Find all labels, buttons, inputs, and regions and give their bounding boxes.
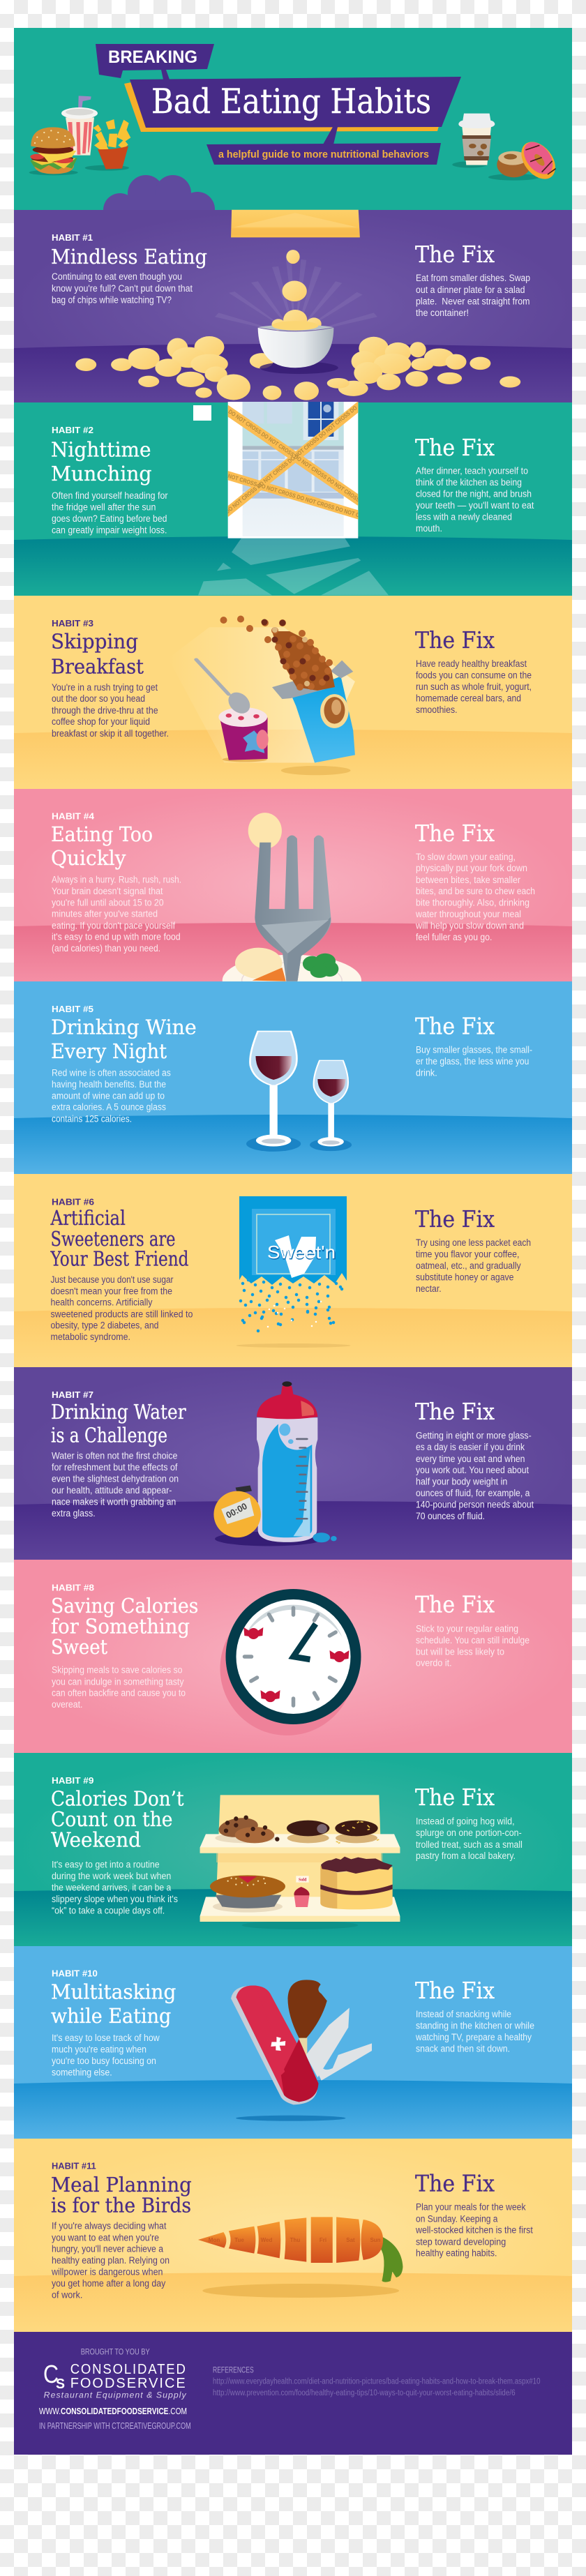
text block: coffee shop for your liquid bbox=[52, 716, 150, 727]
text block: during the work week but when bbox=[52, 1871, 171, 1881]
text block bbox=[52, 1665, 186, 1710]
heading: Sweet bbox=[51, 1635, 107, 1659]
fix heading: The Fix bbox=[415, 820, 495, 847]
fix heading: The Fix bbox=[415, 1013, 495, 1040]
icon: bakery shelves bbox=[200, 1795, 400, 1929]
fix text: 70 ounces of fluid. bbox=[416, 1511, 485, 1521]
text block: amount of wine can add up to bbox=[52, 1090, 165, 1101]
icon: burger, soda and fries bbox=[29, 96, 130, 175]
fix text: step toward developing bbox=[416, 2236, 506, 2247]
fix text: watching TV, prepare a healthy bbox=[415, 2032, 532, 2042]
text block: If you're always deciding what bbox=[52, 2221, 167, 2231]
icon: water bottle and stopwatch bbox=[213, 1381, 337, 1546]
icon: sliced carrot calendar: Thu bbox=[290, 2237, 300, 2243]
fix text: splurge on one portion-con- bbox=[416, 1828, 522, 1838]
text block: nace makes it worth grabbing an bbox=[52, 1497, 176, 1507]
fix text: plate. Never eat straight from bbox=[416, 296, 530, 307]
text block: it's easy to end up with more food bbox=[52, 932, 181, 942]
fix text: homemade cereal bars, and bbox=[416, 693, 521, 703]
heading: Skipping bbox=[51, 630, 138, 654]
text block: extra glass. bbox=[52, 1508, 96, 1519]
text block: even the slightest dehydration on bbox=[52, 1474, 179, 1484]
text block: You're in a rush trying to get bbox=[52, 682, 158, 693]
heading: Multitasking bbox=[51, 1980, 176, 2003]
icon: sliced carrot calendar: Sat bbox=[346, 2237, 355, 2243]
fix text: physically put your fork down bbox=[416, 863, 527, 873]
label: HABIT #5 bbox=[52, 1004, 93, 1014]
fix text bbox=[416, 1816, 523, 1861]
fix text: ounces of fluid, for example, a bbox=[416, 1488, 530, 1498]
fix text: will help you slow down and bbox=[415, 921, 524, 931]
fix text: out a dinner plate for a salad bbox=[416, 285, 525, 295]
heading: Calories Don’t bbox=[51, 1787, 184, 1811]
icon: dissolving sweetener packet bbox=[236, 1196, 350, 1348]
fix heading: The Fix bbox=[415, 1398, 495, 1425]
heading: is for the Birds bbox=[51, 2193, 191, 2217]
fix heading: The Fix bbox=[415, 626, 495, 654]
icon: sliced carrot calendar: Wed bbox=[261, 2237, 272, 2243]
references: http://www.prevention.com/food/healthy-eating-tips/10-ways-to-quit-your-worst-eating-habits/slide/6 bbox=[213, 2389, 516, 2397]
fix text: snack and then sit down. bbox=[416, 2044, 510, 2054]
fix text: Instead of going hog wild, bbox=[416, 1816, 515, 1826]
text block: for refreshment but the effects of bbox=[52, 1462, 178, 1472]
text block bbox=[52, 2033, 160, 2077]
heading: Count on the bbox=[51, 1807, 173, 1831]
text block: Your brain doesn't signal that bbox=[52, 886, 163, 896]
heading bbox=[51, 438, 152, 485]
text block: willpower is dangerous when bbox=[51, 2267, 163, 2277]
text block: something else. bbox=[52, 2067, 112, 2077]
text block: metabolic syndrome. bbox=[50, 1332, 130, 1342]
heading: is a Challenge bbox=[51, 1423, 167, 1447]
text block: you want to eat when you're bbox=[52, 2232, 159, 2243]
text block bbox=[52, 1450, 179, 1519]
label: HABIT #8 bbox=[52, 1583, 94, 1592]
heading: Artificial bbox=[50, 1206, 126, 1230]
text block: Often find yourself heading for bbox=[52, 490, 168, 501]
fix text: time you flavor your coffee, bbox=[416, 1249, 519, 1260]
icon: fork with plate bbox=[223, 813, 361, 1007]
icon: sliced carrot calendar: Fri bbox=[320, 2237, 326, 2243]
banner: subtitle: a helpful guide to more nutritional behaviors bbox=[218, 149, 429, 160]
fix text: water throughout your meal bbox=[415, 909, 521, 919]
fix text: well-stocked kitchen is the first bbox=[415, 2225, 533, 2236]
label: HABIT #2 bbox=[52, 425, 93, 435]
text block bbox=[52, 490, 168, 536]
text block bbox=[50, 1274, 193, 1342]
text block: healthy eating plan. Relying on bbox=[52, 2255, 170, 2266]
heading bbox=[51, 1787, 184, 1851]
panel: habit 9 calories on the weekend bbox=[14, 1753, 572, 1946]
heading: while Eating bbox=[51, 2004, 171, 2028]
icon: taped-off kitchen bbox=[198, 402, 389, 595]
logo: Consolidated Foodservice bbox=[43, 2360, 187, 2400]
text block: Continuing to eat even though you bbox=[52, 271, 182, 282]
text block: eating. If you don't pace yourself bbox=[52, 920, 175, 931]
fix text: er the glass, the less wine you bbox=[416, 1056, 529, 1067]
panel: habit 10 multitasking bbox=[14, 1946, 572, 2139]
panel: habit 3 skipping breakfast bbox=[14, 596, 572, 789]
label: HABIT #7 bbox=[52, 1390, 93, 1400]
text block: breakfast or skip it all together. bbox=[52, 728, 169, 739]
heading bbox=[51, 1594, 198, 1659]
fix text: 140-pound person needs about bbox=[416, 1500, 534, 1510]
logo: Consolidated Foodservice: CONSOLIDATED bbox=[70, 2362, 187, 2377]
text block: you get home after a long day bbox=[52, 2278, 166, 2289]
header panel bbox=[14, 28, 572, 210]
fix text bbox=[415, 852, 535, 942]
fix text: Getting in eight or more glass- bbox=[416, 1430, 532, 1441]
text block: (and calories) than you need. bbox=[52, 943, 160, 954]
text block: sweetened products are still linked to bbox=[50, 1309, 193, 1319]
logo: Consolidated Foodservice: Restaurant Equipment & Supply bbox=[44, 2392, 187, 2400]
icon: sliced carrot calendar: Sun bbox=[370, 2237, 381, 2243]
text block bbox=[52, 1860, 178, 1915]
text block: you're too busy focusing on bbox=[52, 2056, 156, 2066]
logo: Consolidated Foodservice: C bbox=[43, 2360, 59, 2388]
fix text: mouth. bbox=[416, 523, 442, 534]
fix text: feel fuller as you go. bbox=[416, 932, 492, 942]
heading: Quickly bbox=[51, 846, 126, 870]
fix text bbox=[416, 466, 534, 534]
fix text: every time you eat and when bbox=[416, 1454, 525, 1464]
text block bbox=[51, 2221, 170, 2300]
heading: Weekend bbox=[51, 1828, 141, 1851]
text block: contains 125 calories. bbox=[52, 1113, 132, 1124]
fix text: Have ready healthy breakfast bbox=[416, 658, 527, 669]
icon: cloud bbox=[103, 175, 215, 227]
text block: Water is often not the first choice bbox=[52, 1450, 177, 1461]
icon: sliced carrot calendar: Mon bbox=[209, 2237, 220, 2243]
text block: our health, attitude and appear- bbox=[52, 1485, 172, 1496]
icon: two wine glasses bbox=[246, 1032, 352, 1152]
text block: hungry, you'll never achieve a bbox=[52, 2244, 163, 2254]
heading: Saving Calories bbox=[51, 1594, 198, 1618]
heading: Every Night bbox=[51, 1039, 167, 1063]
fix heading: The Fix bbox=[415, 2170, 495, 2197]
text block: extra calories. A 5 ounce glass bbox=[52, 1102, 166, 1113]
fix text: Eat from smaller dishes. Swap bbox=[416, 273, 530, 283]
fix text: bite thoroughly. Also, drinking bbox=[416, 898, 529, 908]
fix text bbox=[416, 1430, 534, 1521]
fix heading: The Fix bbox=[415, 1977, 495, 2004]
label: HABIT #4 bbox=[52, 811, 94, 821]
heading: for Something bbox=[51, 1615, 190, 1639]
text block: slippery slope when you think it's bbox=[52, 1894, 178, 1904]
text block: having health benefits. But the bbox=[52, 1079, 166, 1090]
fix text: schedule. You can still indulge bbox=[416, 1635, 529, 1645]
text block: you're full until about 15 to 20 bbox=[52, 897, 164, 907]
heading: Meal Planning bbox=[51, 2173, 192, 2197]
banner: BREAKING bbox=[96, 44, 214, 80]
fix heading: The Fix bbox=[415, 1205, 495, 1233]
text block: the weekend arrives, it can be a bbox=[52, 1883, 172, 1893]
icon: sliced carrot calendar: Tue bbox=[234, 2237, 244, 2243]
heading bbox=[51, 2173, 192, 2217]
label: HABIT #11 bbox=[52, 2162, 96, 2171]
text block: know you're full? Can't put down that bbox=[52, 283, 193, 294]
fix text: half your body weight in bbox=[416, 1476, 507, 1486]
icon: sliced carrot calendar bbox=[198, 2217, 403, 2298]
references bbox=[213, 2366, 540, 2397]
logo: Consolidated Foodservice: FOODSERVICE bbox=[70, 2376, 187, 2391]
fix text: oatmeal, etc., and gradually bbox=[416, 1260, 521, 1271]
text block: It's easy to get into a routine bbox=[52, 1860, 160, 1870]
fix heading: The Fix bbox=[415, 241, 495, 268]
text block: Red wine is often associated as bbox=[52, 1067, 171, 1078]
text block: goes down? Eating before bed bbox=[52, 513, 167, 524]
fix text bbox=[415, 2009, 534, 2054]
text block bbox=[52, 682, 169, 739]
fix text: substitute honey or agave bbox=[416, 1272, 513, 1282]
icon: bakery shelves: Sold bbox=[299, 1878, 307, 1882]
text block: doesn't mean your free from the bbox=[50, 1286, 172, 1296]
heading: Sweeteners are bbox=[50, 1227, 176, 1251]
text block bbox=[52, 1067, 171, 1124]
banner: main title bbox=[124, 77, 461, 132]
text block: you can indulge in something tasty bbox=[52, 1676, 184, 1687]
references: REFERENCES bbox=[213, 2366, 254, 2374]
fix text: Buy smaller glasses, the small- bbox=[416, 1045, 532, 1055]
text block: Skipping meals to save calories so bbox=[52, 1665, 182, 1675]
fix text: After dinner, teach yourself to bbox=[416, 466, 528, 476]
stopwatch readout: 00:00 bbox=[224, 1500, 249, 1521]
label: HABIT #3 bbox=[52, 619, 93, 628]
heading: Your Best Friend bbox=[50, 1247, 188, 1271]
fix text: Stick to your regular eating bbox=[416, 1624, 518, 1634]
fix text: between bites, take smaller bbox=[416, 875, 520, 885]
fix text: nectar. bbox=[416, 1283, 442, 1294]
icon: candy clock bbox=[220, 1589, 361, 1735]
fix text: run such as whole fruit, yogurt, bbox=[416, 681, 532, 692]
heading bbox=[51, 822, 153, 870]
label: HABIT #1 bbox=[52, 233, 93, 243]
heading: Munching bbox=[51, 462, 152, 485]
fix text: Try using one less packet each bbox=[416, 1237, 531, 1248]
fix text bbox=[416, 1045, 532, 1078]
icon: swiss army knife with drumstick bbox=[231, 1980, 372, 2121]
banner: subtitle bbox=[206, 127, 441, 165]
text block: It's easy to lose track of how bbox=[52, 2033, 160, 2043]
icon: coffee cup and donuts bbox=[452, 114, 562, 186]
fix text: less with a newly cleaned bbox=[416, 511, 512, 522]
fix text: Instead of snacking while bbox=[416, 2009, 511, 2019]
fix text: To slow down your eating, bbox=[416, 852, 516, 862]
heading: Drinking Wine bbox=[51, 1016, 197, 1039]
heading: Mindless Eating bbox=[51, 245, 207, 269]
icon: falling cereal bbox=[223, 619, 335, 691]
text block: bag of chips while watching TV? bbox=[52, 294, 172, 306]
website: WWW.CONSOLIDATEDFOODSERVICE.COM bbox=[39, 2406, 187, 2416]
fix text: standing in the kitchen or while bbox=[416, 2021, 534, 2031]
fix text: bites, and be sure to chew each bbox=[416, 886, 535, 896]
panel: habit 4 eating too quickly bbox=[14, 789, 572, 1007]
text block: obesity, type 2 diabetes, and bbox=[50, 1320, 159, 1331]
text block bbox=[52, 271, 193, 306]
icon: taped-off kitchen: DO NOT CROSS DO NOT CROSS DO NOT CROSS DO NOT CROSS DO bbox=[224, 404, 359, 515]
fix text bbox=[416, 1237, 531, 1294]
fix heading: The Fix bbox=[415, 1590, 495, 1618]
text block: can greatly impair weight loss. bbox=[52, 525, 167, 536]
fix text: trolled treat, such as a small bbox=[416, 1839, 523, 1850]
fix text: pastry from a local bakery. bbox=[416, 1851, 516, 1861]
icon: dissolving sweetener packet: Sweet'n bbox=[268, 1243, 336, 1264]
heading: Drinking Water bbox=[51, 1400, 186, 1424]
text block: Just because you don't use sugar bbox=[50, 1274, 174, 1285]
fix text bbox=[415, 2202, 533, 2259]
text block: through the drive-thru at the bbox=[52, 705, 158, 716]
label: HABIT #10 bbox=[52, 1968, 98, 1978]
fix text: closed for the night, and brush bbox=[416, 488, 532, 499]
fix text: smoothies. bbox=[416, 705, 458, 715]
heading bbox=[51, 1400, 186, 1447]
banner: main title: Bad Eating Habits bbox=[151, 82, 431, 121]
fix text bbox=[416, 658, 532, 715]
text block: “ok” to take a couple days off. bbox=[52, 1906, 165, 1915]
text block: the fridge well after the sun bbox=[52, 502, 156, 513]
fix text: but will be less likely to bbox=[416, 1646, 504, 1657]
heading bbox=[50, 1206, 188, 1271]
icon: yogurt cup and cereal bag bbox=[168, 627, 355, 775]
partnership: IN PARTNERSHIP WITH CTCREATIVEGROUP.COM bbox=[39, 2421, 191, 2431]
fix text: think of the kitchen as being bbox=[416, 477, 522, 488]
panel: habit 5 drinking wine every night bbox=[14, 981, 572, 1174]
heading bbox=[51, 1016, 197, 1063]
fix text bbox=[416, 273, 530, 318]
panel: habit 2 nighttime munching bbox=[14, 402, 572, 596]
fix text: overdo it. bbox=[416, 1658, 452, 1669]
fix text: on Sunday. Keeping a bbox=[416, 2213, 498, 2224]
label: HABIT #6 bbox=[52, 1197, 94, 1207]
footer panel bbox=[14, 2332, 572, 2455]
fix text: your teeth — you'll want to eat bbox=[416, 500, 534, 511]
fix text: you work out. You need about bbox=[416, 1465, 529, 1475]
banner: BREAKING: BREAKING bbox=[108, 47, 197, 67]
logo: Consolidated Foodservice: S bbox=[56, 2377, 65, 2392]
brought to you by: BROUGHT TO YOU BY bbox=[81, 2347, 150, 2357]
fix text: Plan your meals for the week bbox=[416, 2202, 526, 2213]
text block: of work. bbox=[52, 2289, 82, 2300]
text block: health concerns. Artificially bbox=[50, 1297, 153, 1308]
fix text: foods you can consume on the bbox=[416, 670, 532, 681]
fix text: healthy eating habits. bbox=[416, 2248, 497, 2259]
panel: habit 11 meal planning bbox=[14, 2139, 572, 2332]
heading: Nighttime bbox=[51, 438, 151, 462]
text block bbox=[52, 874, 181, 954]
fix text bbox=[416, 1624, 529, 1669]
text block: can often backfire and cause you to bbox=[52, 1688, 186, 1698]
text block: much you're eating when bbox=[52, 2044, 146, 2055]
fix text: the container! bbox=[416, 308, 469, 318]
heading bbox=[51, 1980, 176, 2028]
fix heading: The Fix bbox=[415, 1784, 495, 1811]
heading: Breakfast bbox=[51, 654, 144, 678]
text block: out the door so you head bbox=[52, 693, 145, 704]
text block: overeat. bbox=[52, 1699, 82, 1710]
fix heading: The Fix bbox=[415, 434, 495, 461]
heading: Eating Too bbox=[51, 822, 153, 846]
icon: dissolving sweetener packet: Sweet'n bbox=[267, 1242, 336, 1263]
panel: habit 1 mindless eating bbox=[14, 175, 572, 402]
icon: taped-off kitchen: NOT CROSS DO NOT CROSS DO NOT CROSS DO NOT C bbox=[227, 472, 361, 518]
label: HABIT #9 bbox=[52, 1776, 93, 1786]
text block: minutes after you've started bbox=[52, 909, 158, 919]
panel: habit 7 drinking water bbox=[14, 1367, 572, 1560]
heading bbox=[51, 630, 144, 678]
fix text: drink. bbox=[416, 1067, 437, 1078]
icon: bowl of chips spilling from bag bbox=[75, 210, 520, 400]
icon: taped-off kitchen: DO NOT CROSS DO NOT CROSS DO NOT CROSS DO NOT CROSS bbox=[227, 408, 361, 504]
panel: habit 8 saving calories bbox=[14, 1560, 572, 1753]
fix text: es a day is easier if you drink bbox=[416, 1442, 525, 1452]
panel: habit 6 artificial sweeteners bbox=[14, 1174, 572, 1367]
text block: Always in a hurry. Rush, rush, rush. bbox=[52, 874, 181, 884]
